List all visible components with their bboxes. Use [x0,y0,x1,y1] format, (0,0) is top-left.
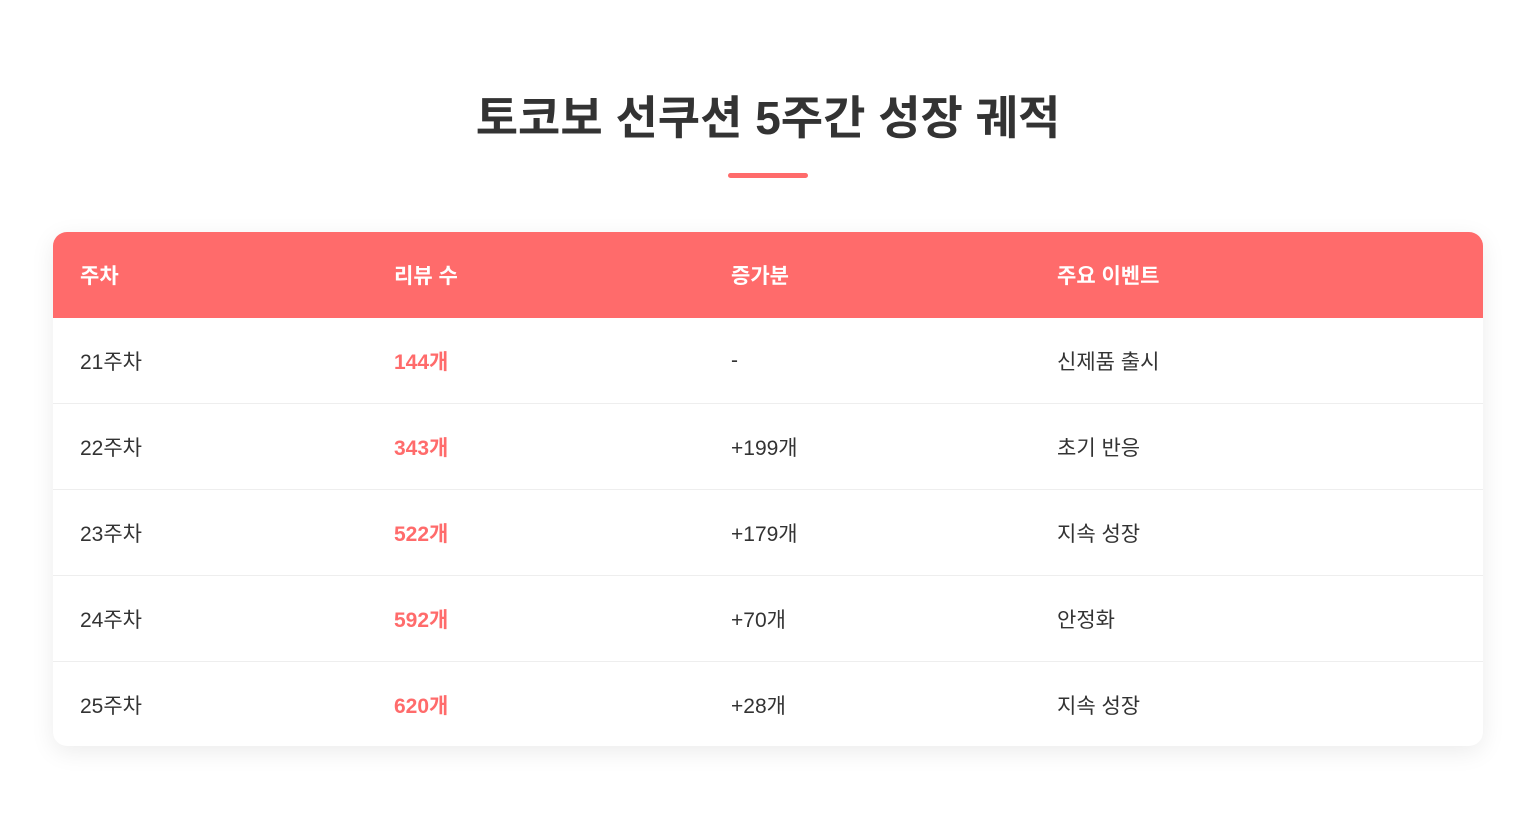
title underline accent [728,173,808,178]
row: week 22: 343개 [394,436,448,460]
row: week 22: +199개 [731,436,798,460]
row: week 24 [53,576,1483,662]
table header row [53,232,1483,318]
row: week 23: +179개 [731,522,798,546]
title: 토코보 선쿠션 5주간 성장 궤적 [476,92,1060,144]
row: week 25: +28개 [731,694,786,718]
row: week 22 [53,404,1483,490]
row: week 23 [53,490,1483,576]
table: weekly review growth [53,232,1483,746]
row: week 21: - [731,348,738,372]
row: week 22: 22주차 [80,436,142,460]
row: week 21 [53,318,1483,404]
row: week 23: 23주차 [80,522,142,546]
row: week 25: 25주차 [80,694,142,718]
row: week 25 [80,694,1140,718]
row: week 25: 지속 성장 [1057,694,1140,718]
row: week 25: 620개 [394,694,448,718]
table header row: 주차 [80,265,119,288]
table header row: 증가분 [731,265,789,288]
table header row: 주요 이벤트 [1057,265,1159,288]
row: week 23: 522개 [394,522,448,546]
row: week 24: +70개 [731,608,786,632]
row: week 22: 초기 반응 [1057,436,1140,460]
row: week 24: 592개 [394,608,448,632]
row: week 23: 지속 성장 [1057,522,1140,546]
row: week 24: 24주차 [80,608,142,632]
row: week 21: 신제품 출시 [1057,350,1159,374]
row: week 21: 21주차 [80,350,142,374]
row: week 21: 144개 [394,350,448,374]
table header row: 리뷰 수 [394,265,458,288]
row: week 24: 안정화 [1057,608,1115,632]
